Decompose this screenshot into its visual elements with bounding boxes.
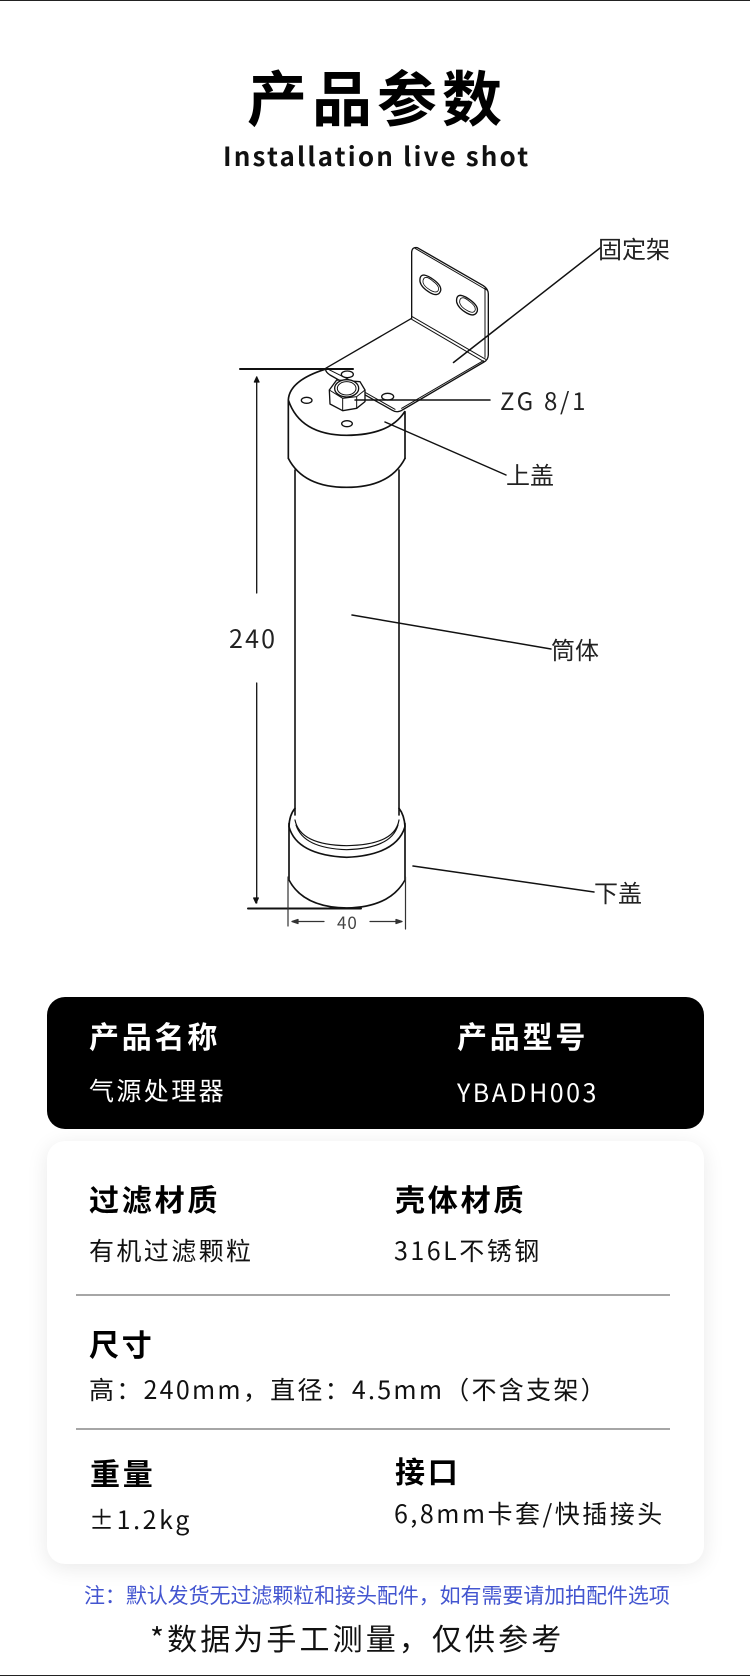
panel: product name and model — [47, 997, 704, 1129]
hex nut — [329, 380, 365, 411]
diagram: filter drawing — [240, 248, 600, 929]
bracket — [326, 248, 488, 412]
title: 产品参数 — [247, 52, 507, 139]
product diagram — [229, 230, 670, 934]
heading: weight: 重量 — [90, 1450, 156, 1494]
heading: filter material: 过滤材质 — [89, 1176, 220, 1220]
subtitle: Installation live shot — [223, 137, 530, 174]
heading: connector: 接口 — [395, 1448, 461, 1492]
value: connector: 6,8mm卡套/快插接头 — [394, 1495, 665, 1531]
top cap — [288, 369, 405, 487]
value: product name: 气源处理器 — [89, 1072, 226, 1108]
label: top cap: 上盖 — [506, 456, 554, 491]
dimension 40 lines — [288, 877, 406, 929]
dimension 240 lines — [240, 369, 361, 908]
panel: specifications — [47, 1141, 704, 1564]
value: weight: ±1.2kg — [89, 1501, 192, 1537]
heading: product model: 产品型号 — [457, 1013, 588, 1057]
note: accessories: 注：默认发货无过滤颗粒和接头配件，如有需要请加拍配件选项 — [84, 1580, 670, 1610]
label: body: 筒体 — [551, 631, 599, 666]
heading: size: 尺寸 — [89, 1321, 155, 1365]
leader lines — [352, 248, 600, 892]
note: measurement disclaimer: *数据为手工测量，仅供参考 — [150, 1615, 564, 1659]
value: shell material: 316L不锈钢 — [394, 1232, 542, 1268]
value: size: 高：240mm，直径：4.5mm（不含支架） — [89, 1371, 608, 1407]
bottom cap — [289, 808, 405, 908]
label: thread size: ZG 8/1 — [500, 382, 588, 417]
cylinder body — [295, 470, 399, 815]
label: height 240: 240 — [229, 620, 277, 656]
value: filter material: 有机过滤颗粒 — [89, 1232, 253, 1268]
heading: shell material: 壳体材质 — [395, 1176, 526, 1220]
label: diameter 40: 40 — [337, 909, 358, 934]
label: bracket: 固定架 — [598, 230, 670, 265]
heading: product name: 产品名称 — [89, 1013, 220, 1057]
value: product model: YBADH003 — [457, 1074, 599, 1110]
label: bottom cap: 下盖 — [594, 874, 642, 909]
